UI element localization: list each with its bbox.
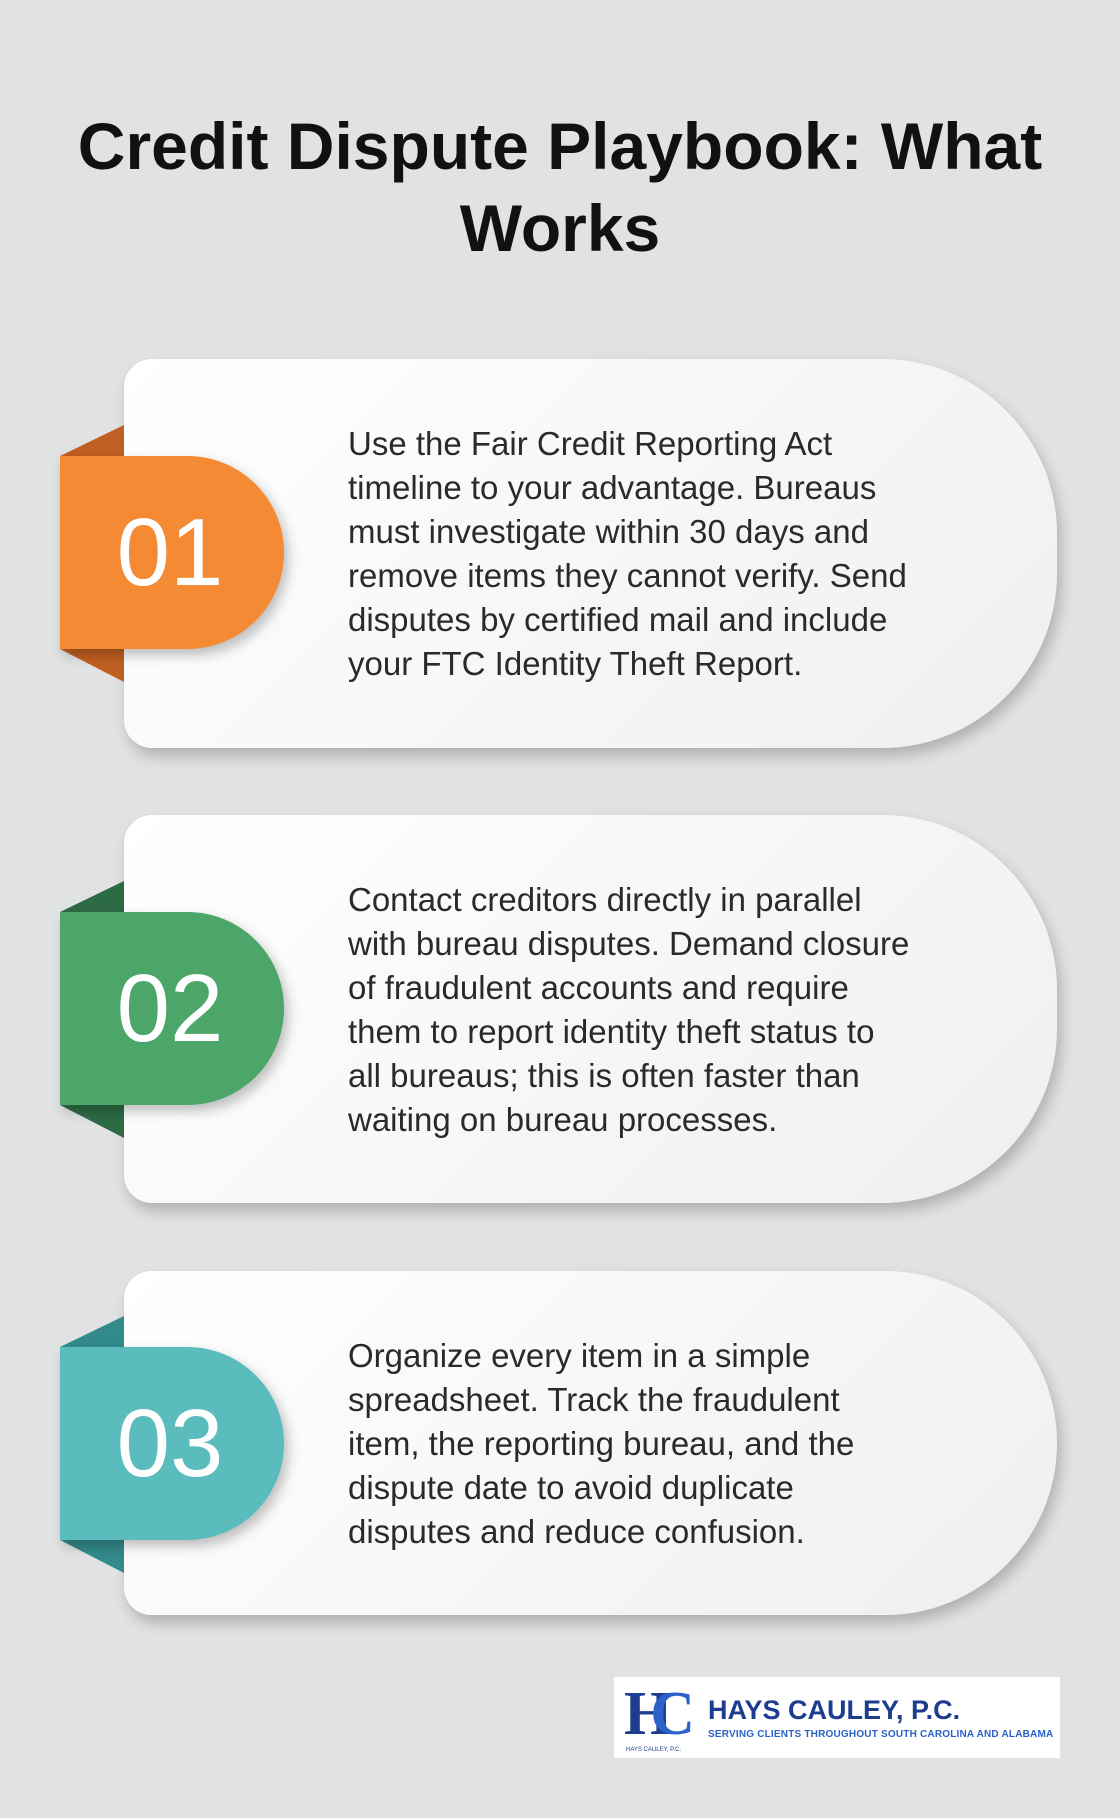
badge 01 xyxy=(60,456,284,649)
text: step 3: item, the reporting bureau, and the xyxy=(348,1425,854,1462)
text: step 2: them to report identity theft status to xyxy=(348,1013,874,1050)
text: step 1: remove items they cannot verify. Send xyxy=(348,557,907,594)
badge 03 xyxy=(60,1347,284,1540)
fold bottom 2 xyxy=(60,1105,124,1138)
text: step 1 xyxy=(348,425,907,682)
title: Credit Dispute Playbook: What xyxy=(78,109,1042,183)
title xyxy=(78,109,1042,265)
panel: step 1 xyxy=(124,359,1057,748)
text: step 2: all bureaus; this is often faster than xyxy=(348,1057,860,1094)
badge 03: 03 xyxy=(117,1390,223,1497)
text: step 1: Use the Fair Credit Reporting Act xyxy=(348,425,832,462)
text: step 1: your FTC Identity Theft Report. xyxy=(348,645,802,682)
fold bottom 3 xyxy=(60,1540,124,1573)
logo text: HAYS CAULEY, P.C. xyxy=(708,1695,960,1725)
text: step 1: timeline to your advantage. Bureaus xyxy=(348,469,876,506)
logo: SERVING CLIENTS THROUGHOUT SOUTH CAROLINA AND ALABAMA xyxy=(708,1729,1053,1740)
text: step 3: dispute date to avoid duplicate xyxy=(348,1469,794,1506)
logo xyxy=(614,1677,1060,1758)
text: step 2: waiting on bureau processes. xyxy=(348,1101,777,1138)
text: step 3: disputes and reduce confusion. xyxy=(348,1513,805,1550)
panel: step 2 xyxy=(124,815,1057,1203)
logo: HAYS CAULEY, P.C. xyxy=(626,1747,681,1753)
text: step 3: Organize every item in a simple xyxy=(348,1337,810,1374)
badge 02 xyxy=(60,912,284,1105)
title: Works xyxy=(460,191,660,265)
badge 01: 01 xyxy=(117,499,223,606)
text: step 1: must investigate within 30 days and xyxy=(348,513,869,550)
logo mark: HC xyxy=(624,1680,695,1748)
text: step 3: spreadsheet. Track the fraudulent xyxy=(348,1381,840,1418)
fold bottom 1 xyxy=(60,649,124,682)
text: step 1: disputes by certified mail and include xyxy=(348,601,887,638)
panel: step 3 xyxy=(124,1271,1057,1615)
text: step 2: Contact creditors directly in parallel xyxy=(348,881,862,918)
fold top 3 xyxy=(60,1316,124,1347)
text: step 2: of fraudulent accounts and require xyxy=(348,969,849,1006)
fold top 2 xyxy=(60,881,124,912)
badge 02: 02 xyxy=(117,955,223,1062)
fold top 1 xyxy=(60,425,124,456)
text: step 3 xyxy=(348,1337,854,1550)
text: step 2 xyxy=(348,881,909,1138)
text: step 2: with bureau disputes. Demand closure xyxy=(348,925,909,962)
